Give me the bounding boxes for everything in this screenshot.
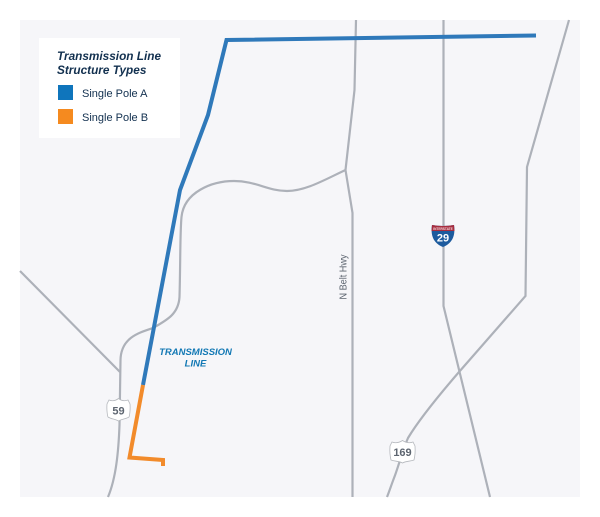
legend background <box>39 38 180 138</box>
icon: US 59 shield <box>107 398 130 421</box>
icon: Interstate 29 shield <box>432 225 454 247</box>
road label: N Belt Hwy: N Belt Hwy <box>338 254 350 300</box>
icon: Interstate 29 shield: INTERSTATE <box>433 227 453 231</box>
panel: legend <box>39 38 180 138</box>
legend label: Single Pole A: Single Pole A <box>82 88 148 100</box>
icon: Interstate 29 shield: 29 <box>437 232 449 244</box>
road: western diagonal <box>20 271 120 372</box>
transmission line label: TRANSMISSION <box>159 347 233 358</box>
road: Interstate 29 <box>444 20 490 497</box>
transmission line: single pole B segment <box>130 385 163 466</box>
legend swatch: Single Pole A <box>58 85 73 100</box>
legend label: Single Pole B: Single Pole B <box>82 112 148 124</box>
transmission line label: LINE <box>185 358 207 370</box>
legend heading: Structure Types <box>57 63 147 77</box>
road: N Belt Hwy <box>346 20 356 497</box>
legend heading: Transmission Line <box>57 49 161 63</box>
road: highway 169 <box>387 20 569 497</box>
icon: US 59 shield: 59 <box>112 406 125 418</box>
transmission line: single pole A segment <box>143 36 536 385</box>
road: connector curve and highway 59 <box>108 170 346 497</box>
icon: US 169 shield: 169 <box>393 447 412 459</box>
legend swatch: Single Pole B <box>58 109 73 124</box>
icon: US 169 shield <box>390 440 415 463</box>
